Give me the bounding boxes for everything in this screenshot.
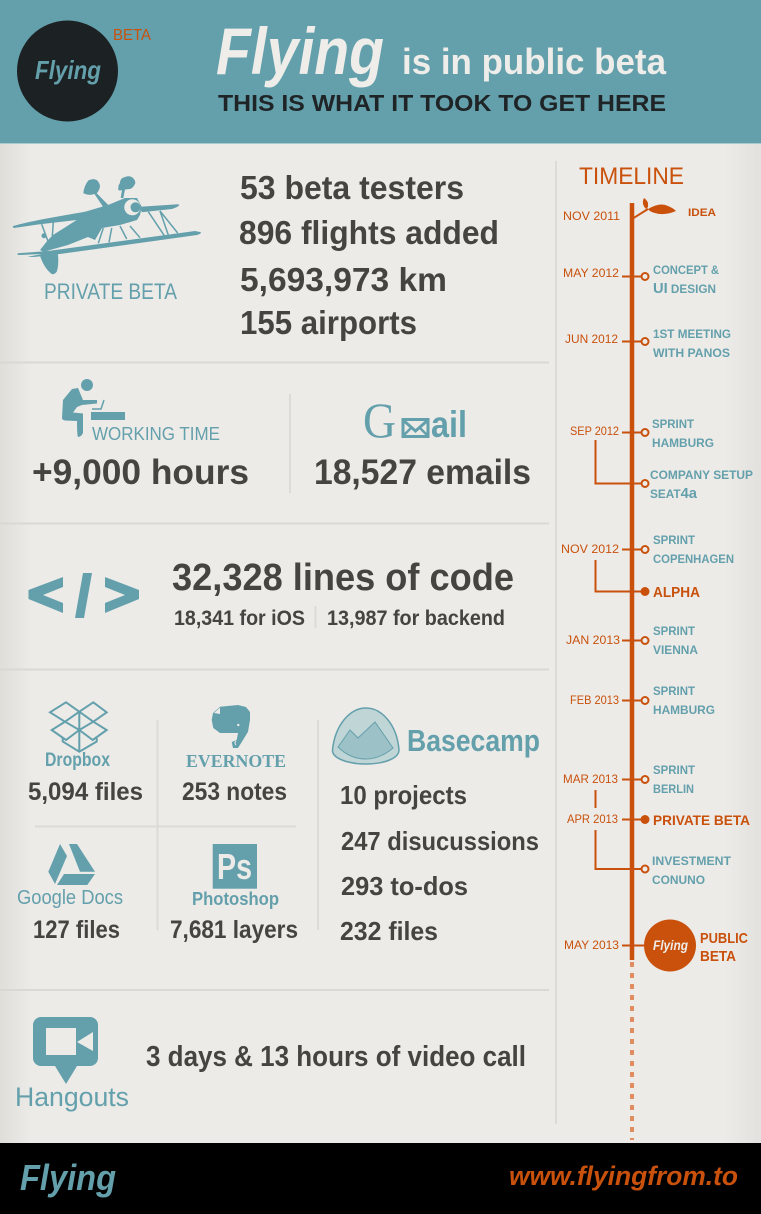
event: concept: UI DESIGN xyxy=(653,280,716,297)
event: sprint Hamburg 2013 xyxy=(570,684,715,717)
stat: testers: 53 beta testers xyxy=(240,169,464,206)
event: company setup: COMPANY SETUP xyxy=(650,468,753,482)
event: sprint Hamburg 2013: HAMBURG xyxy=(653,703,715,717)
event: public beta: Flying xyxy=(653,937,688,953)
event: first meeting xyxy=(565,327,731,360)
Evernote label: EVERNOTE xyxy=(186,751,286,771)
timeline heading: TIMELINE xyxy=(579,163,684,190)
stat: Evernote notes: 253 notes xyxy=(182,778,287,806)
stat: to-dos: 293 to-dos xyxy=(341,871,468,901)
stat: Dropbox files: 5,094 files xyxy=(28,778,143,806)
event: sprint Hamburg 2012: SEP 2012 xyxy=(570,424,619,438)
event: sprint Berlin xyxy=(563,763,696,796)
event: public beta: BETA xyxy=(700,948,736,965)
event: private beta: APR 2013 xyxy=(567,812,618,826)
event: sprint Berlin: MAR 2013 xyxy=(563,772,618,786)
stat: backend: 13,987 for backend xyxy=(327,607,505,630)
event: first meeting: WITH PANOS xyxy=(653,346,730,360)
header banner xyxy=(0,0,761,144)
logo badge: Flying xyxy=(35,55,101,85)
event: idea: NOV 2011 xyxy=(563,209,620,223)
logo: Gmail: G xyxy=(363,392,396,448)
event: alpha xyxy=(596,560,700,601)
timeline future dotted xyxy=(630,962,634,1140)
logo: Gmail: ail xyxy=(431,404,467,445)
footer url: www.flyingfrom.to xyxy=(509,1161,738,1191)
icon: biplane with wing walkers xyxy=(13,176,201,274)
stat: projects: 10 projects xyxy=(340,780,467,810)
stat: Google files: 127 files xyxy=(33,916,120,944)
icon: Google Docs xyxy=(48,844,95,885)
icon: Dropbox xyxy=(50,702,107,752)
panel: hangouts xyxy=(15,1017,526,1112)
subtitle: THIS IS WHAT IT TOOK TO GET HERE xyxy=(218,90,666,116)
working time label: WORKING TIME xyxy=(92,424,220,444)
event: investment: INVESTMENT xyxy=(652,854,732,868)
panel: working time and email xyxy=(32,379,531,493)
event: idea: IDEA xyxy=(688,207,716,219)
icon: Evernote elephant xyxy=(212,705,250,748)
timeline spine xyxy=(630,203,634,960)
logo badge xyxy=(17,20,118,122)
Google Docs label: Google Docs xyxy=(17,887,123,909)
stat: discussions: 247 disucussions xyxy=(341,826,539,856)
event: private beta: PRIVATE BETA xyxy=(653,812,750,828)
stat: Basecamp files: 232 files xyxy=(340,916,438,946)
event: sprint Copenhagen xyxy=(561,533,734,566)
event: sprint Berlin: SPRINT xyxy=(653,763,696,777)
stat: km: 5,693,973 km xyxy=(240,261,447,298)
stat: iOS: 18,341 for iOS xyxy=(174,607,305,630)
event: idea xyxy=(563,207,716,223)
icon: sprout xyxy=(632,198,676,219)
stat: Photoshop layers: 7,681 layers xyxy=(170,916,298,944)
event: concept: CONCEPT & xyxy=(653,263,719,277)
event: concept: MAY 2012 xyxy=(563,266,619,280)
Photoshop label: Photoshop xyxy=(192,889,279,909)
stat: flights: 896 flights added xyxy=(239,214,499,251)
event: sprint Copenhagen: SPRINT xyxy=(653,533,696,547)
event: public beta: MAY 2013 xyxy=(564,938,619,952)
Hangouts label: Hangouts xyxy=(15,1082,129,1112)
event: alpha: ALPHA xyxy=(653,584,700,601)
stat: airports: 155 airports xyxy=(240,304,417,341)
Dropbox label: Dropbox xyxy=(45,750,110,771)
event: company setup xyxy=(596,440,753,502)
stat: hours: +9,000 hours xyxy=(32,453,249,492)
stat: lines of code: 32,328 lines of code xyxy=(172,557,514,599)
Basecamp label: Basecamp xyxy=(407,723,540,758)
icon: person working xyxy=(62,379,125,437)
event: public beta xyxy=(564,920,748,972)
event: company setup: SEAT4a xyxy=(650,485,698,502)
event: sprint Hamburg 2012: HAMBURG xyxy=(652,436,714,450)
stat: video call: 3 days & 13 hours of video call xyxy=(146,1041,526,1073)
event: private beta xyxy=(567,790,750,828)
event: public beta: PUBLIC xyxy=(700,930,748,947)
panel: private beta xyxy=(13,169,499,341)
icon: Basecamp xyxy=(332,708,399,764)
event: sprint Copenhagen: COPENHAGEN xyxy=(653,552,734,566)
event: investment: CONUNO xyxy=(652,873,705,887)
stat: emails: 18,527 emails xyxy=(314,453,531,492)
event: first meeting: JUN 2012 xyxy=(565,332,618,346)
icon: code brackets xyxy=(28,573,139,618)
event: sprint Hamburg 2012 xyxy=(570,417,714,450)
event: sprint Hamburg 2013: FEB 2013 xyxy=(570,693,619,707)
event: first meeting: 1ST MEETING xyxy=(653,327,731,341)
title suffix: is in public beta xyxy=(402,41,667,82)
panel: timeline xyxy=(561,163,753,1140)
event: sprint Copenhagen: NOV 2012 xyxy=(561,542,619,556)
beta tag: BETA xyxy=(113,27,151,44)
panel: tools xyxy=(17,702,540,946)
event: sprint Hamburg 2012: SPRINT xyxy=(652,417,695,431)
logo: Gmail xyxy=(363,392,467,448)
event: sprint Vienna xyxy=(566,624,698,657)
title: Flying xyxy=(216,14,384,88)
label: PRIVATE BETA xyxy=(44,279,177,304)
event: investment xyxy=(596,830,732,887)
icon: Photoshop: Ps xyxy=(217,846,252,887)
event: concept xyxy=(563,263,719,297)
event: sprint Vienna: JAN 2013 xyxy=(566,633,620,647)
event: sprint Hamburg 2013: SPRINT xyxy=(653,684,696,698)
event: sprint Berlin: BERLIN xyxy=(653,782,694,796)
icon: video bubble xyxy=(33,1017,98,1084)
panel: code xyxy=(28,557,514,630)
footer xyxy=(0,1143,761,1214)
footer logo: Flying xyxy=(20,1157,116,1198)
event: sprint Vienna: VIENNA xyxy=(653,643,698,657)
event: sprint Vienna: SPRINT xyxy=(653,624,696,638)
